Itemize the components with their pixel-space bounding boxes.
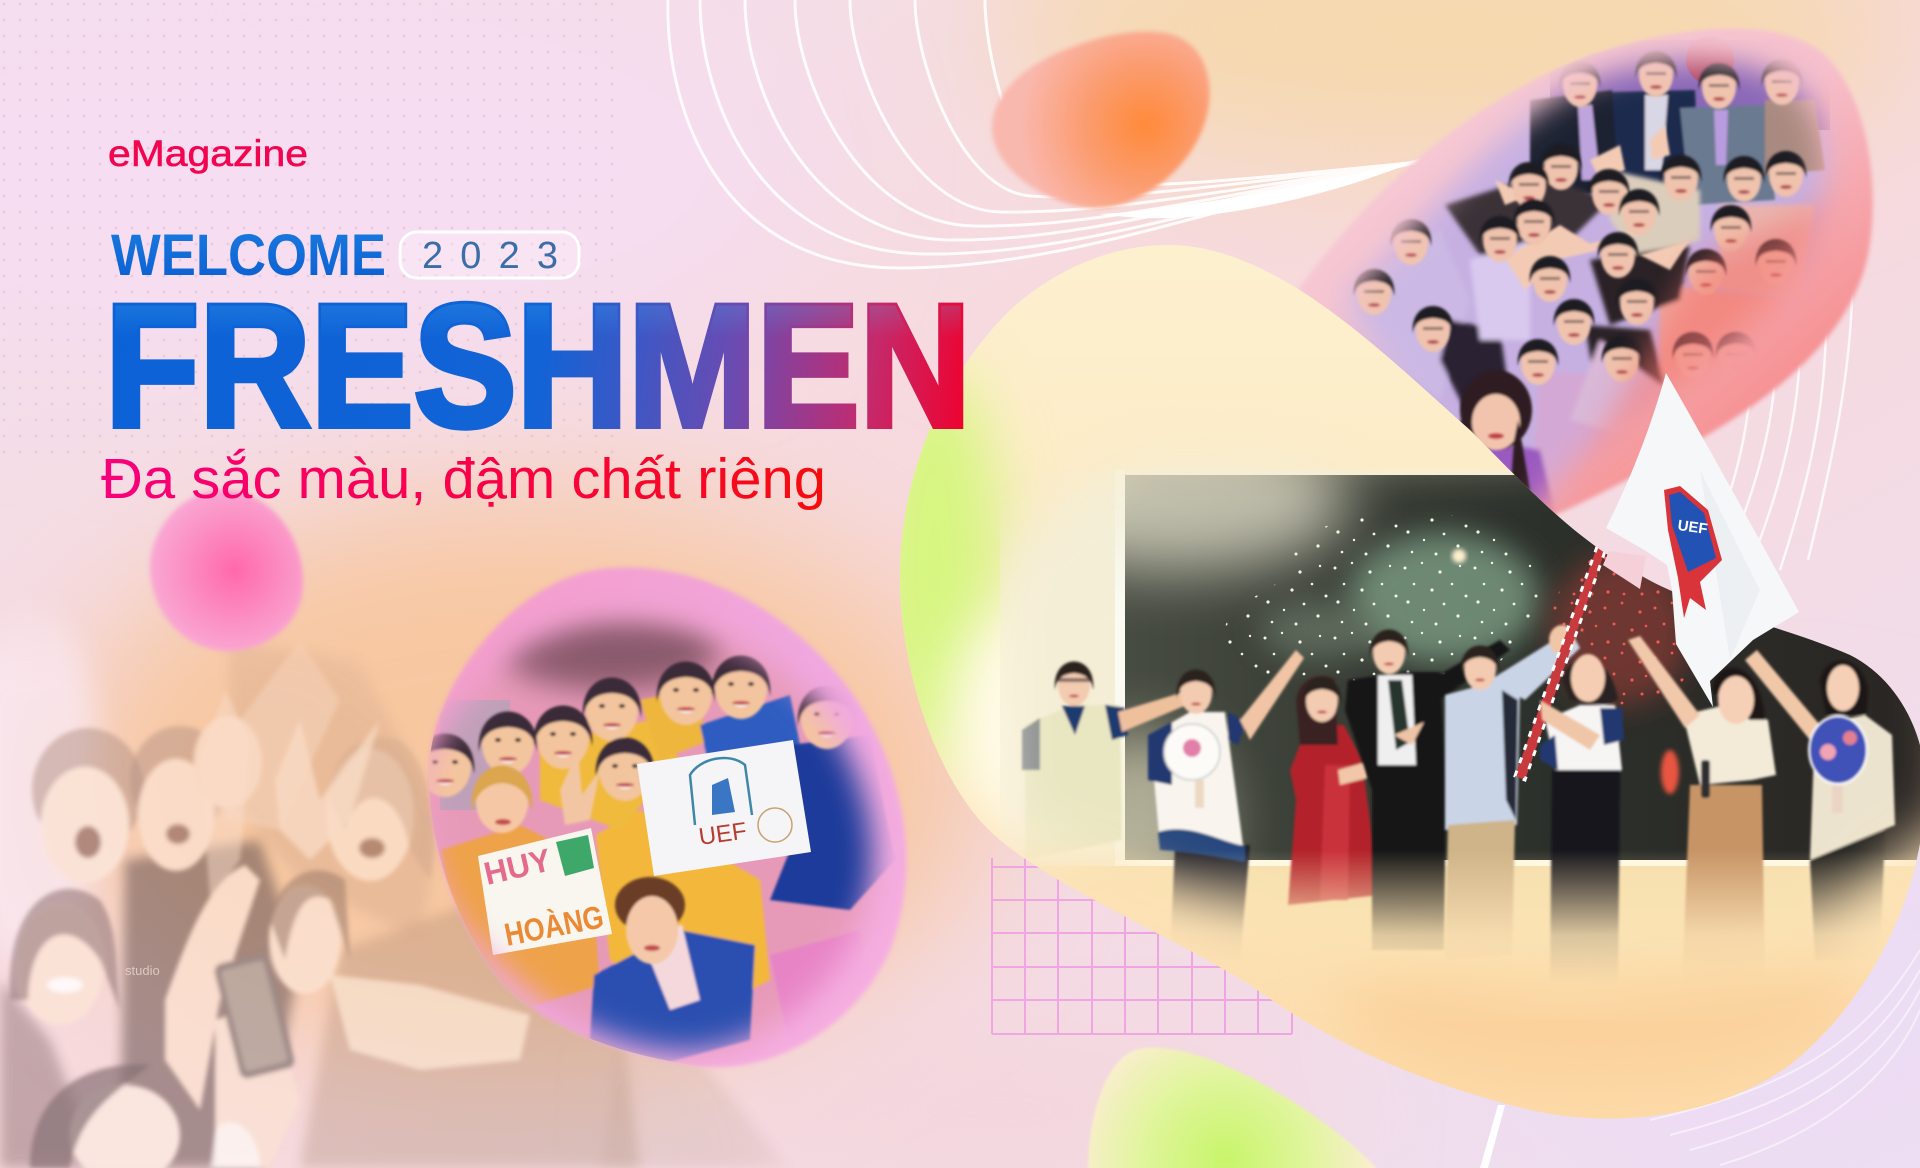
heading: FRESHMEN: FRESHMEN [105,269,971,464]
HUY HOANG sign: HUY [480,842,554,892]
student faces [1354,51,1806,500]
hands gesture [1495,125,1690,290]
person 6 [1540,654,1624,990]
white concentric curves top [668,0,1420,268]
person 3 red dress [1288,676,1380,905]
pink notch beside flag [1603,551,1646,589]
faces [416,656,856,964]
UEF flag [1606,373,1799,707]
heading: WELCOME: WELCOME [111,223,386,288]
dark hair and shirt patches [1438,170,1815,512]
coral overlay lower right [1587,194,1834,458]
screen wash top-left [1115,467,1384,611]
HUY HOANG sign [478,828,612,955]
UEF sign: UEF [697,818,748,851]
pink grid [992,858,1292,1034]
UEF sign [637,740,811,876]
faint curves bottom right [1650,950,1920,1165]
white swoosh wedge [1100,158,1424,218]
flag shield logo [1664,486,1722,618]
shirts [441,690,895,1070]
flag shield logo: UEF [1677,517,1709,538]
grayscale crowd photo [0,590,790,1168]
person 8 [1745,650,1895,960]
stage photo [1000,430,1920,1020]
photo blob: freshmen with signs [416,560,940,1080]
person 5 light blue jacket [1445,625,1580,960]
person 4 black suit [1345,630,1510,950]
subtitle: Đa sắc màu, đậm chất riêng [101,447,826,511]
orange blob [992,32,1210,208]
person 1 [1022,662,1194,860]
heading: FRESHMEN: FRESHMEN [105,269,971,464]
grayscale crowd photo: studio [125,963,160,978]
year pill [400,232,579,278]
green blob bottom [1088,1048,1378,1168]
pink blob [150,490,303,651]
person 2 [1148,650,1304,960]
teachers in suits [1530,90,1825,205]
white stroke bottom [1480,1105,1505,1168]
legs fade to floor [1000,850,1920,1020]
year pill: 2023 [422,235,558,277]
white curves right side [1712,295,1852,570]
brand label: eMagazine [108,133,308,174]
dot pattern top left [0,0,620,460]
person 7 [1628,636,1776,990]
photo blob: class group top right [1299,28,1875,516]
flag pole [1515,530,1611,780]
large cream blob with stage photo [870,245,1920,1119]
fireworks [1223,514,1700,794]
HUY HOANG sign: HOÀNG [501,898,606,953]
